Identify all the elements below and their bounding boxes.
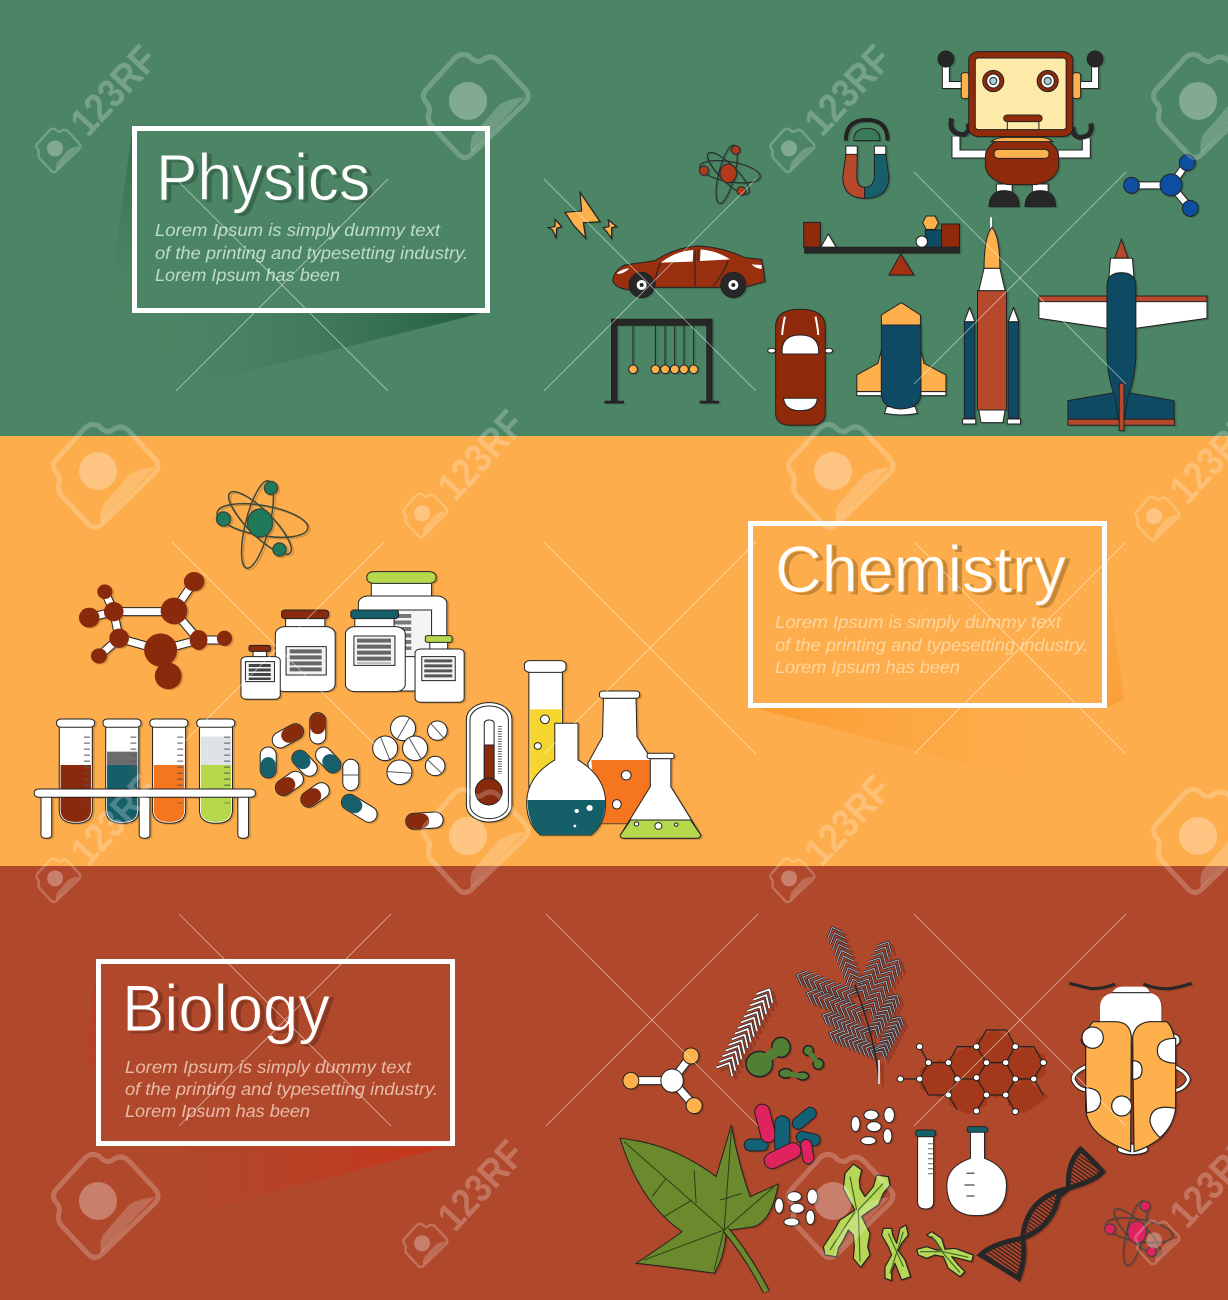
icon: car top view [768, 309, 833, 425]
icon: tablets [373, 716, 447, 785]
illustrations: chemistry [34, 572, 701, 838]
icon: atom pink [1103, 1199, 1174, 1268]
text block: physics description: Lorem Ipsum has been [155, 265, 340, 285]
panel: physics [0, 0, 1228, 436]
text block: chemistry description: Lorem Ipsum is simply dummy text [775, 612, 1062, 632]
text block: chemistry description [775, 612, 1088, 677]
heading: Physics: Physics [156, 140, 370, 214]
title box: physics [134, 128, 488, 310]
illustrations: biology [620, 1029, 1103, 1292]
icon: newton's cradle [605, 319, 719, 403]
icon: seeds lower [775, 1189, 817, 1226]
icon: capsules [268, 721, 435, 821]
icon: medicine bottles [241, 572, 464, 702]
panel: biology [0, 866, 1228, 1300]
title box: chemistry [750, 524, 1104, 706]
text block: biology description [125, 1057, 438, 1121]
icon: molecule orange [623, 1048, 702, 1114]
icon: atom red [698, 143, 762, 205]
icon: thermometer [466, 703, 512, 822]
icon: laboratory flasks [524, 661, 701, 838]
title box: biology [98, 962, 452, 1144]
icon: atom green [215, 478, 310, 571]
icon: beetle [1069, 983, 1192, 1155]
icon: test tubes in rack [34, 719, 255, 838]
icon: molecule brown [79, 572, 232, 689]
heading: Biology: Biology [122, 971, 330, 1045]
icon: test tube [916, 1130, 936, 1209]
icon: shuttle [857, 303, 946, 415]
icon: molecule blue [1124, 155, 1198, 216]
icon: robot [938, 51, 1103, 207]
icon: hexagonal molecule lattice [897, 1029, 1049, 1115]
icon: green pods [746, 1037, 824, 1080]
text block: physics description [155, 220, 468, 285]
text block: biology description: of the printing and typesetting industry. [125, 1079, 438, 1099]
icon: magnet [843, 120, 889, 198]
icon: car side view [613, 246, 765, 298]
watermark: 123RF logos: 123RF [429, 402, 533, 509]
illustrations: physics [605, 51, 1207, 431]
icon: chromosomes [823, 1164, 973, 1281]
panel: chemistry [0, 436, 1228, 866]
watermark: 123RF logos: 123RF [62, 37, 166, 144]
watermark: 123RF logos: 123RF [796, 37, 900, 144]
illustrations: physics, fine detail [548, 143, 765, 298]
icon: seeds upper [851, 1107, 894, 1145]
icon: plane [1039, 239, 1207, 431]
heading: Chemistry: Chemistry [775, 532, 1066, 606]
icon: small feathered leaf [716, 985, 777, 1076]
watermark: 123RF logos: 123RF [429, 1132, 533, 1239]
box shadow: biology [78, 975, 445, 1222]
box shadow: chemistry [755, 560, 1124, 782]
watermark: 123RF logos: 123RF [796, 767, 900, 874]
icon: rocket [963, 217, 1020, 424]
icon: bacteria pink and blue [750, 1112, 814, 1161]
text block: biology description: Lorem Ipsum is simply dummy text [125, 1057, 412, 1077]
text block: chemistry description: Lorem Ipsum has been [775, 657, 960, 677]
icon: lightning bolts [548, 192, 617, 238]
watermark: 123RF logos: 123RF [62, 767, 166, 874]
text block: physics description: Lorem Ipsum is simply dummy text [155, 220, 441, 240]
icon: DNA helix [980, 1149, 1103, 1278]
icon: round flask [947, 1127, 1007, 1216]
text block: physics description: of the printing and typesetting industry. [155, 243, 468, 263]
text block: chemistry description: of the printing and typesetting industry. [775, 635, 1088, 655]
icon: large fern [794, 924, 906, 1084]
box shadow: physics [108, 132, 482, 386]
text block: biology description: Lorem Ipsum has been [125, 1101, 310, 1121]
icon: ivy leaf [620, 1125, 778, 1292]
icon: balance seesaw [804, 216, 959, 275]
